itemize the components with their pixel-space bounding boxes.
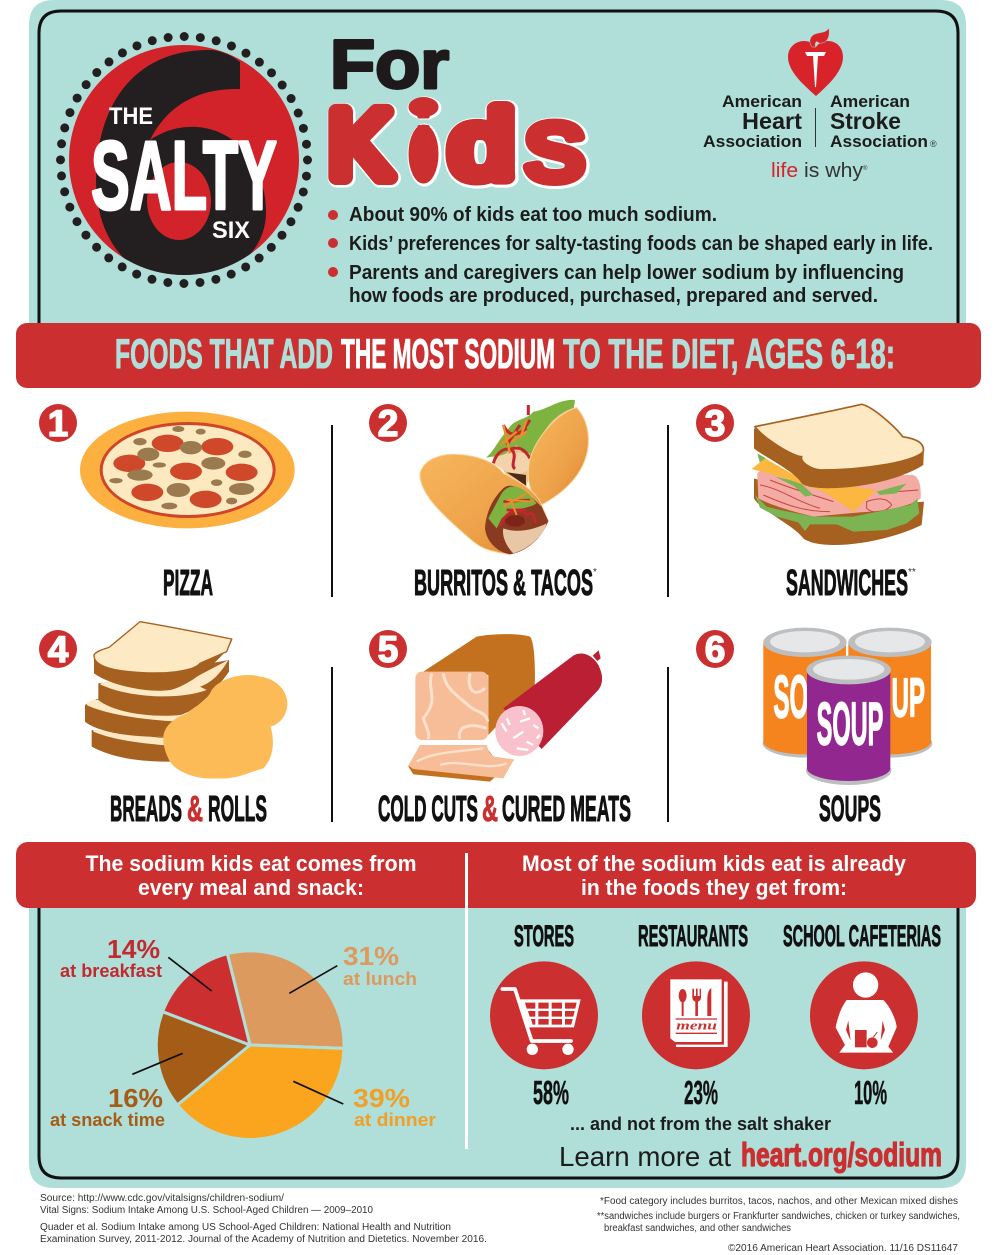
banner: lower headings <box>16 842 976 908</box>
icon: sandwich <box>752 404 924 545</box>
icon: shopping cart <box>490 961 598 1069</box>
logo: American Heart and Stroke Association: ® <box>930 139 937 149</box>
label: burritos and tacos <box>414 562 597 603</box>
logo: American Heart and Stroke Association: ® <box>863 165 868 172</box>
food 1: pizza: PIZZA <box>163 562 213 603</box>
icon: burrito and taco <box>420 400 588 554</box>
logo: American Heart and Stroke Association: Stroke <box>830 108 901 134</box>
logo: The Salty Six badge: SALTY <box>91 121 277 230</box>
text: CURED MEATS <box>502 788 631 829</box>
title: Kids: K <box>330 93 392 199</box>
title: Kids: K <box>328 92 392 198</box>
logo: American Heart and Stroke Association: American <box>830 92 910 111</box>
food 5: cold cuts and cured meats <box>369 629 631 829</box>
label: 39% at dinner: 39% <box>353 1083 410 1113</box>
food 2: burritos and tacos <box>369 400 597 603</box>
number badge 4: 4 <box>48 629 69 670</box>
footer: footnotes and copyright: breakfast sandwiches, and other sandwiches <box>604 1223 791 1234</box>
banner: lower headings: Most of the sodium kids eat is already <box>522 851 907 876</box>
number badge 1 <box>39 403 77 444</box>
banner: lower headings: in the foods they get from: <box>581 875 847 900</box>
icon: deli meats <box>408 634 602 782</box>
footer: footnotes and copyright: ©2016 American Heart Association. 11/16 DS11647 <box>728 1243 958 1254</box>
value: 23%: 23% <box>684 1074 718 1111</box>
title: Kids <box>328 86 586 204</box>
icon: student with tray <box>810 961 918 1069</box>
column: school cafeterias: 10% <box>854 1074 887 1111</box>
column: stores: STORES <box>514 920 574 953</box>
logo: American Heart and Stroke Association: life is why <box>771 160 863 182</box>
column: stores <box>490 920 598 1111</box>
logo: The Salty Six badge: THE <box>109 103 153 130</box>
logo: American Heart and Stroke Association <box>703 28 937 182</box>
label: sandwiches: ** <box>908 567 916 578</box>
label: breads and rolls: & <box>187 788 203 829</box>
food 1: pizza <box>39 403 295 603</box>
chart: pie of sodium by meal <box>50 934 436 1139</box>
number badge 3 <box>696 403 734 444</box>
title: Kids: d <box>450 92 514 198</box>
label: 16% at snack time <box>50 1083 165 1130</box>
label: 14% at breakfast <box>60 934 162 981</box>
label: 31% at lunch: 31% <box>343 941 399 971</box>
number badge 1: 1 <box>48 403 68 444</box>
label: 31% at lunch <box>343 941 417 989</box>
label: sandwiches <box>786 562 916 603</box>
call to action: learn more: Learn more at <box>559 1141 731 1172</box>
call to action: learn more <box>559 1136 942 1173</box>
label: 16% at snack time: at snack time <box>50 1109 165 1130</box>
value: 58%: 58% <box>533 1074 569 1111</box>
food 6: soups <box>696 628 932 829</box>
footer: footnotes and copyright: *Food category includes burritos, tacos, nachos, and other Mexican mixed dishes <box>600 1196 958 1207</box>
footer: sources: Quader et al. Sodium Intake among US School-Aged Children: National Health and Nutrition <box>40 1222 451 1233</box>
pie slices and leader lines <box>132 951 344 1139</box>
label: 14% at breakfast: 14% <box>107 934 160 964</box>
food 4: breads and rolls: ROLLS <box>208 788 267 829</box>
label: 31% at lunch: at lunch <box>343 968 417 989</box>
text block: intro bullets <box>328 204 933 307</box>
number badge 5: 5 <box>378 629 398 670</box>
panel: top teal header <box>29 0 966 360</box>
label: 16% at snack time: 16% <box>108 1083 163 1113</box>
label: breads and rolls: BREADS <box>110 788 182 829</box>
label: 39% at dinner: at dinner <box>354 1109 436 1130</box>
text: and not from the salt shaker: ... and not from the salt shaker <box>570 1114 831 1134</box>
icon: soup cans: SOUP <box>817 690 883 757</box>
number badge 6: 6 <box>705 629 725 670</box>
text block: intro bullets: Parents and caregivers can help lower sodium by influencing <box>349 262 904 284</box>
number badge 2 <box>369 403 407 444</box>
icon: soup cans: SO <box>773 664 808 731</box>
footer: sources: Vital Signs: Sodium Intake Among U.S. School-Aged Children — 2009–2010 <box>40 1205 373 1216</box>
logo: American Heart and Stroke Association: Heart <box>742 108 802 134</box>
logo: The Salty Six badge: SIX <box>212 217 250 244</box>
title: For: For <box>330 26 449 103</box>
title: Kids: d <box>451 93 515 199</box>
footer: footnotes and copyright <box>597 1196 960 1254</box>
footer: sources <box>40 1193 487 1245</box>
label: burritos and tacos: * <box>593 567 597 578</box>
food 6: soups: SOUPS <box>819 788 881 829</box>
footer: sources: Examination Survey, 2011-2012. Journal of the Academy of Nutrition and Dietetics. November 2016. <box>40 1234 487 1245</box>
logo: The Salty Six badge <box>60 36 308 284</box>
banner: lower headings: The sodium kids eat comes from <box>86 851 416 876</box>
number badge 2: 2 <box>378 403 398 444</box>
banner: foods that add the most sodium: FOODS THAT ADD <box>115 330 333 377</box>
icon: breads and rolls <box>85 622 287 779</box>
logo: American Heart and Stroke Association: Association <box>703 132 802 151</box>
footer: sources: Source: http://www.cdc.gov/vitalsigns/children-sodium/ <box>40 1193 284 1204</box>
icon: pizza <box>80 412 295 528</box>
text: RESTAURANTS <box>638 920 748 953</box>
food 4: breads and rolls <box>39 622 287 829</box>
logo: American Heart and Stroke Association: American <box>722 92 802 111</box>
footer: footnotes and copyright: **sandwiches include burgers or Frankfurter sandwiches, chicken or turkey sandwiches, <box>597 1211 960 1222</box>
number badge 5 <box>369 629 407 670</box>
banner: foods that add the most sodium <box>16 323 981 388</box>
icon: soup cans: UP <box>892 667 925 729</box>
logo: American Heart and Stroke Association: Association <box>830 132 928 151</box>
text block: intro bullets: Kids’ preferences for salty-tasting foods can be shaped early in life. <box>349 233 933 255</box>
title: Kids: i <box>414 93 435 199</box>
column: restaurants <box>638 920 750 1111</box>
column: school cafeterias <box>783 920 941 1111</box>
panel: bottom teal section <box>29 870 966 1188</box>
label: burritos and tacos: BURRITOS & TACOS <box>414 562 593 603</box>
icon: menu <box>642 961 750 1069</box>
number badge 6 <box>696 629 734 670</box>
icon: soup cans <box>763 628 932 785</box>
number badge 4 <box>39 629 77 670</box>
banner: foods that add the most sodium: THE MOST SODIUM <box>341 330 555 377</box>
text block: intro bullets: About 90% of kids eat too much sodium. <box>349 204 717 226</box>
icon: menu: menu <box>676 1018 717 1032</box>
food 3: sandwiches <box>696 403 924 603</box>
banner: lower headings: every meal and snack: <box>138 875 364 900</box>
title: Kids: i <box>413 92 434 198</box>
label: 39% at dinner <box>353 1083 436 1130</box>
title: Kids: s <box>526 87 586 204</box>
label: cold cuts and cured meats: & <box>482 788 498 829</box>
text block: intro bullets: how foods are produced, purchased, prepared and served. <box>349 285 878 307</box>
label: 14% at breakfast: at breakfast <box>60 960 162 981</box>
label: cold cuts and cured meats: COLD CUTS <box>378 788 478 829</box>
number badge 3: 3 <box>705 403 725 444</box>
title: Kids: s <box>525 86 585 203</box>
